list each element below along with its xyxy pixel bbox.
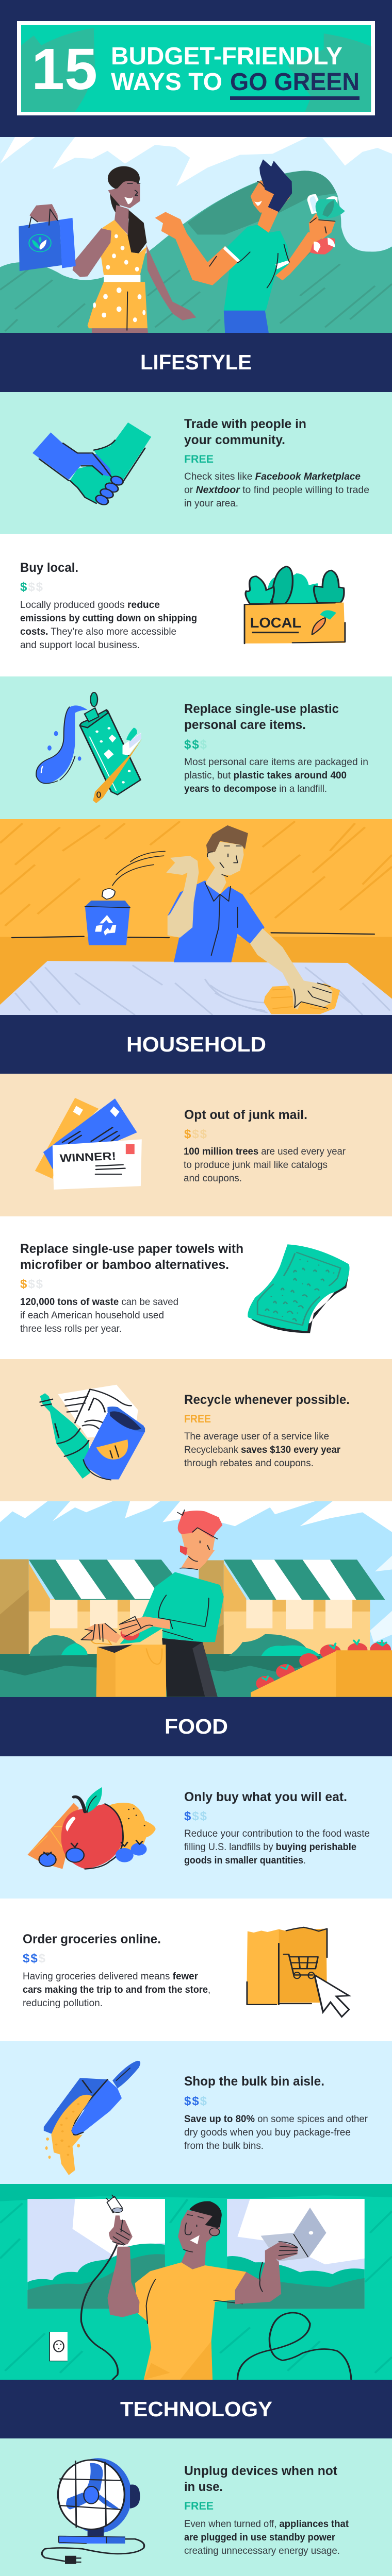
description: costs. They’re also more accessible <box>20 626 176 637</box>
cost rating: $$$ <box>184 2094 207 2108</box>
cost label: FREE <box>184 1413 211 1425</box>
panel: title header <box>0 0 392 137</box>
description: in your area. <box>184 498 238 509</box>
icon: paper bag with shopping cart <box>247 1927 349 2017</box>
description: Locally produced goods reduce <box>20 600 160 611</box>
section heading band: lifestyle: LIFESTYLE <box>140 350 252 374</box>
description <box>184 1431 341 1469</box>
description <box>184 757 368 794</box>
icon: desk fan <box>42 2458 144 2564</box>
description: Reduce your contribution to the food waste <box>184 1828 370 1839</box>
heading: Only buy what you will eat. <box>184 1790 347 1804</box>
icon: local produce crate: LOCAL <box>250 615 301 631</box>
description: and support local business. <box>20 640 140 651</box>
woman with shopping bag <box>19 166 196 333</box>
description: Having groceries delivered means fewer <box>23 1971 199 1982</box>
icon: junk mail envelopes: WINNER! <box>59 1150 117 1165</box>
shelf lines <box>12 933 374 938</box>
heading: Buy local. <box>20 561 78 575</box>
description: from the bulk bins. <box>184 2141 264 2151</box>
description <box>184 2519 349 2556</box>
cost label: FREE <box>184 453 214 465</box>
woman with grocery bag <box>81 1510 224 1697</box>
section heading band: household <box>0 1015 392 1074</box>
title: text: GO GREEN <box>230 69 360 96</box>
wall socket <box>50 2332 68 2361</box>
heading: Shop the bulk bin aisle. <box>184 2074 324 2089</box>
description: Save up to 80% on some spices and other <box>184 2114 368 2125</box>
description <box>184 1828 370 1866</box>
heading: in use. <box>184 2480 223 2494</box>
panel: unplug devices <box>0 2438 392 2576</box>
panel: trade with people <box>0 392 392 534</box>
section heading band: technology <box>0 2380 392 2438</box>
description: emissions by cutting down on shipping <box>20 613 197 624</box>
market stalls <box>0 1560 392 1697</box>
description: three less rolls per year. <box>20 1324 122 1334</box>
illustration: man recycling at table <box>0 819 392 1015</box>
illustration: man unplugging devices <box>0 2184 392 2380</box>
heading: Trade with people in <box>184 417 306 431</box>
icon: junk mail envelopes <box>35 1098 142 1190</box>
title: text: BUDGET-FRIENDLY <box>111 43 342 70</box>
description: years to decompose in a landfill. <box>184 784 327 794</box>
heading: Order groceries online. <box>23 1932 161 1946</box>
heading: microfiber or bamboo alternatives. <box>20 1258 229 1272</box>
icon: handshake <box>32 422 151 506</box>
description: Recyclebank saves $130 every year <box>184 1445 341 1455</box>
cost rating: $$$ <box>23 1952 46 1965</box>
panel: replace plastic personal care items <box>0 676 392 819</box>
man holding radishes <box>155 159 345 333</box>
section heading band: technology: TECHNOLOGY <box>120 2397 272 2421</box>
heading: Opt out of junk mail. <box>184 1108 307 1122</box>
cost rating: $$$ <box>184 1127 207 1141</box>
icon: bulk bin scoop <box>44 2061 140 2175</box>
description: and coupons. <box>184 1173 242 1184</box>
heading: Recycle whenever possible. <box>184 1393 350 1407</box>
panel: recycle whenever possible <box>0 1359 392 1501</box>
description: Check sites like Facebook Marketplace <box>184 471 361 482</box>
panel: order groceries online <box>0 1899 392 2041</box>
panel: only buy what you will eat <box>0 1756 392 1899</box>
title: number 15: 15 <box>31 37 97 101</box>
section heading band: lifestyle <box>0 333 392 392</box>
description: or Nextdoor to find people willing to trade <box>184 485 369 496</box>
cost rating: $$$ <box>20 1277 43 1291</box>
description: cars making the trip to and from the store, <box>23 1985 210 1995</box>
man in blue shirt wiping table <box>166 825 340 1014</box>
section heading band: household: HOUSEHOLD <box>126 1032 266 1056</box>
icon: toothpaste and brush <box>36 692 142 803</box>
description: The average user of a service like <box>184 1431 329 1442</box>
heading <box>20 1242 243 1272</box>
description: to produce junk mail like catalogs <box>184 1160 328 1171</box>
power cords <box>81 2245 351 2380</box>
description <box>184 1146 346 1184</box>
cost label: FREE <box>184 2500 214 2512</box>
panel: opt out of junk mail <box>0 1074 392 1216</box>
table <box>0 961 392 1015</box>
man in yellow shirt <box>107 2201 298 2380</box>
title: text <box>111 43 360 100</box>
heading: Replace single-use plastic <box>184 702 339 716</box>
description: Even when turned off, appliances that <box>184 2519 349 2530</box>
heading <box>184 2464 338 2494</box>
heading: Replace single-use paper towels with <box>20 1242 243 1256</box>
illustration: woman at farmers market <box>0 1501 392 1697</box>
tomato crate <box>251 1640 392 1697</box>
description: if each American household used <box>20 1310 164 1321</box>
heading: Unplug devices when not <box>184 2464 338 2478</box>
description: 100 million trees are used every year <box>184 1146 346 1157</box>
illustration: couple trading produce <box>0 137 392 333</box>
cost rating: $$$ <box>184 1809 207 1823</box>
description: 120,000 tons of waste can be saved <box>20 1297 178 1308</box>
description <box>20 1297 178 1334</box>
heading: personal care items. <box>184 718 306 732</box>
icon: sponge cloth <box>248 1244 350 1333</box>
description <box>20 600 197 651</box>
laptop <box>261 2208 326 2261</box>
description: Most personal care items are packaged in <box>184 757 368 768</box>
description: are plugged in use standby power <box>184 2532 336 2543</box>
description <box>184 2114 368 2151</box>
heading: your community. <box>184 433 285 447</box>
icon: local produce crate <box>244 566 345 643</box>
icon: recyclables bottle paper can <box>40 1385 145 1480</box>
window left <box>27 2199 165 2309</box>
description: filling U.S. landfills by buying perishable <box>184 1842 356 1853</box>
plug <box>106 2195 123 2213</box>
cost rating: $$$ <box>20 580 43 594</box>
section heading band: food <box>0 1697 392 1756</box>
panel: buy local <box>0 534 392 676</box>
recycling bin <box>85 851 165 945</box>
description: goods in smaller quantities. <box>184 1855 306 1866</box>
window right <box>227 2199 365 2309</box>
heading <box>184 417 306 447</box>
description <box>184 471 369 509</box>
section heading band: food: FOOD <box>165 1715 228 1738</box>
icon: fruit group <box>27 1787 156 1869</box>
panel: shop the bulk bin aisle <box>0 2041 392 2184</box>
cost rating: $$$ <box>184 738 207 752</box>
description: through rebates and coupons. <box>184 1458 314 1469</box>
description <box>23 1971 210 2009</box>
description: reducing pollution. <box>23 1998 103 2009</box>
description: creating unnecessary energy usage. <box>184 2546 340 2556</box>
description: plastic, but plastic takes around 400 <box>184 770 347 781</box>
heading <box>184 702 339 732</box>
title: text: WAYS TO <box>111 69 222 96</box>
description: dry goods when you buy package-free <box>184 2127 351 2138</box>
panel: replace paper towels <box>0 1216 392 1359</box>
